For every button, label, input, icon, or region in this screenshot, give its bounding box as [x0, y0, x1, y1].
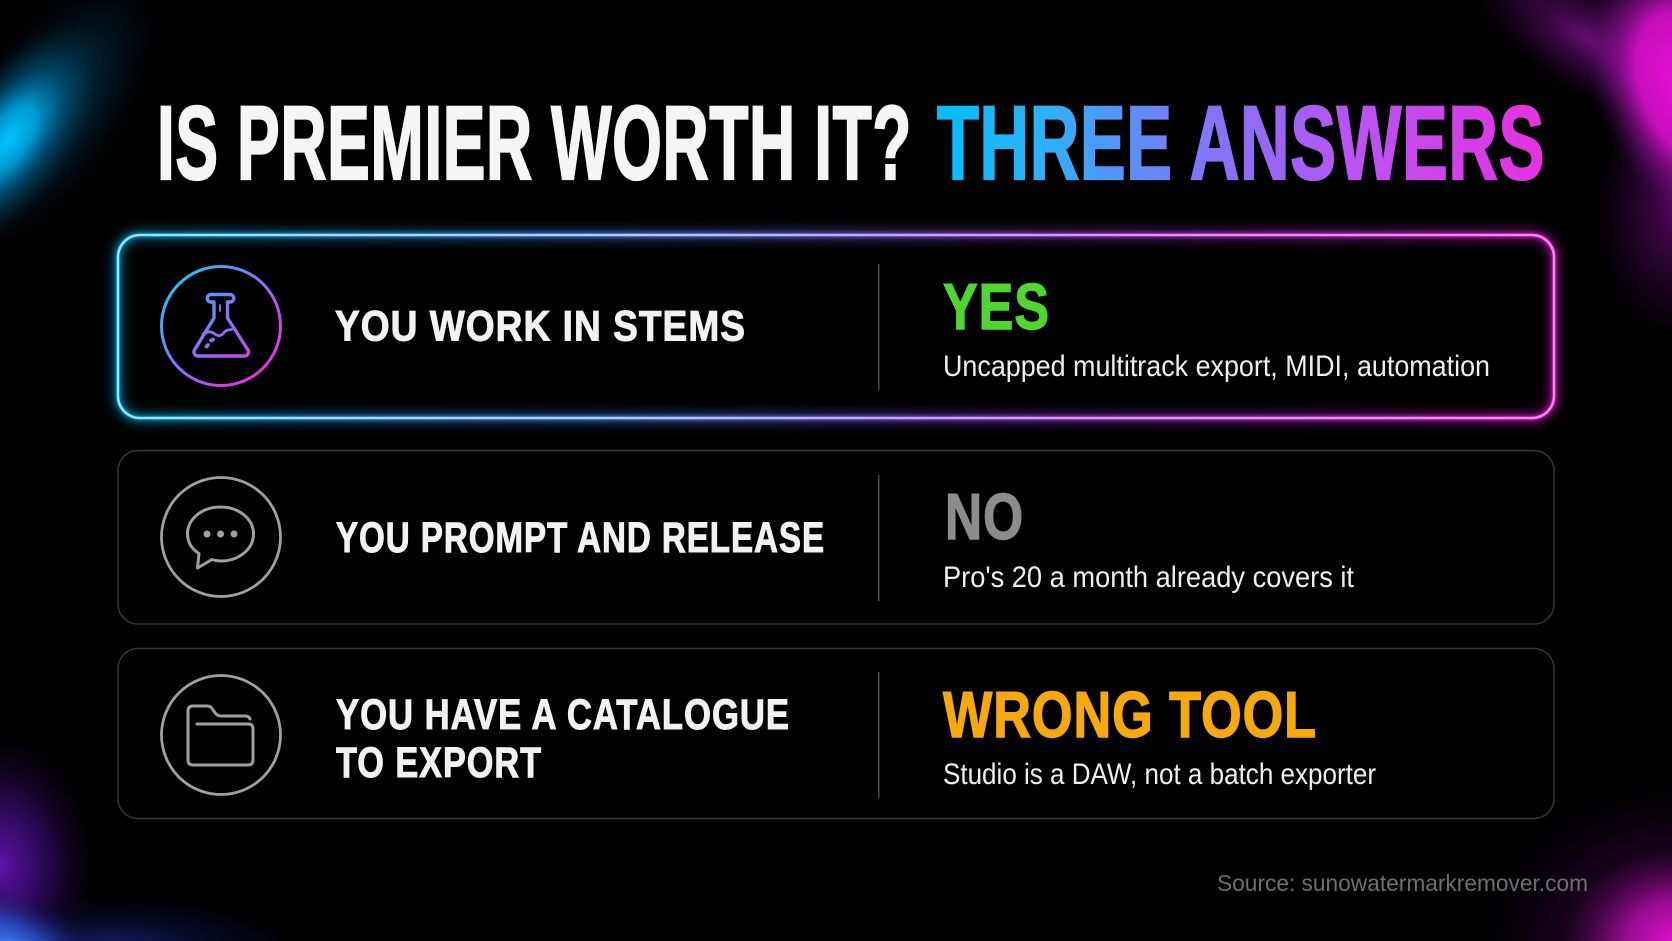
card outline	[118, 648, 1554, 818]
divider	[878, 264, 880, 390]
panel: you prompt and release	[118, 450, 1554, 624]
divider	[878, 475, 880, 601]
icon: folder	[162, 676, 280, 794]
answer detail: Uncapped multitrack export, MIDI, automation	[943, 350, 1490, 383]
panel: you work in stems (highlighted)	[118, 235, 1554, 418]
title: white part: IS PREMIER WORTH IT?	[157, 85, 912, 202]
title	[157, 85, 1545, 202]
panel: you have a catalogue to export	[118, 648, 1554, 818]
answer detail: Pro's 20 a month already covers it	[943, 561, 1355, 594]
answer: yes: YES	[943, 270, 1050, 343]
icon: speech bubble	[162, 478, 280, 596]
answer detail: Studio is a DAW, not a batch exporter	[943, 758, 1376, 791]
source note: Source: sunowatermarkremover.com	[1217, 870, 1588, 896]
answer: wrong tool: WRONG TOOL	[943, 678, 1317, 751]
background glow: magenta bottom right	[1452, 750, 1672, 941]
row label: YOU PROMPT AND RELEASE	[336, 514, 825, 562]
row label	[336, 691, 790, 787]
background glow: magenta top right	[1372, 0, 1672, 360]
row label: YOU WORK IN STEMS	[335, 302, 746, 350]
neon border	[118, 235, 1554, 418]
row label: YOU HAVE A CATALOGUE	[336, 691, 790, 739]
icon: flask	[162, 266, 280, 386]
card outline	[118, 450, 1554, 624]
divider	[878, 672, 880, 798]
background glow: cyan top left	[0, 0, 300, 340]
row label: TO EXPORT	[336, 739, 542, 787]
answer: no: NO	[945, 480, 1024, 553]
background glow: purple and blue bottom left	[0, 700, 320, 941]
